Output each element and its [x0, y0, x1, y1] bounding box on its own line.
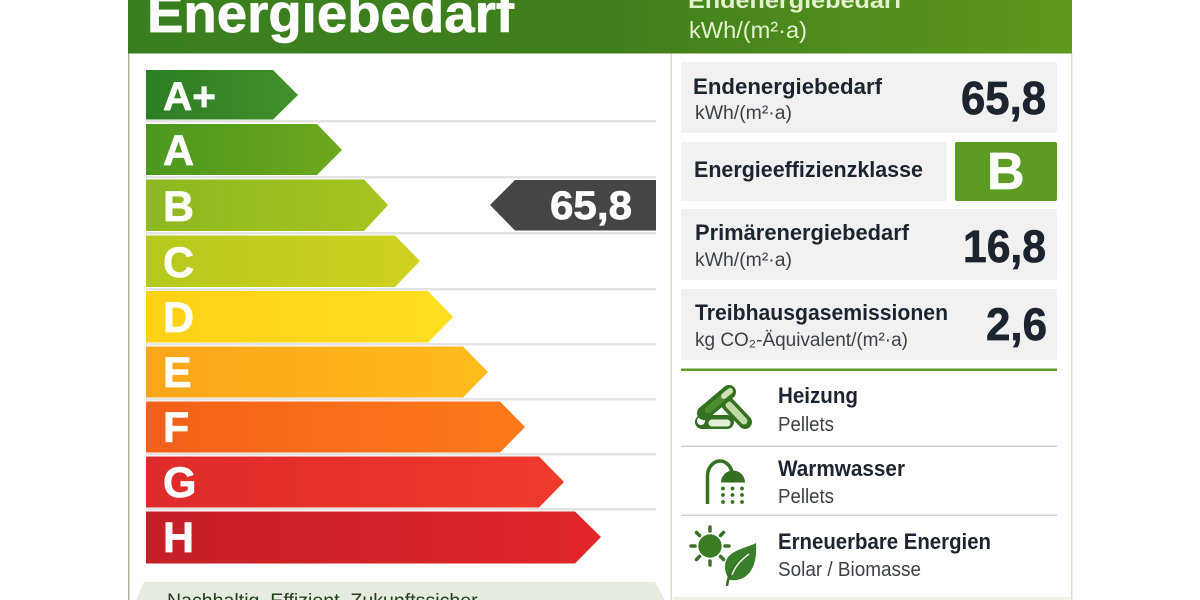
row: Warmwasser	[708, 456, 905, 508]
class A	[146, 124, 342, 175]
card: Endenergiebedarf: 65,8	[961, 72, 1046, 124]
class A+: A+	[163, 75, 216, 119]
icon: pellets	[697, 391, 745, 425]
class F: F	[163, 404, 189, 452]
card: Treibhausgasemissionen	[681, 289, 1057, 360]
header banner	[128, 0, 1072, 54]
card: Primärenergiebedarf: kWh/(m²·a)	[695, 250, 792, 271]
row: Erneuerbare Energien	[691, 527, 991, 586]
class H: H	[163, 514, 194, 562]
class B	[146, 180, 388, 231]
green divider	[681, 368, 1057, 371]
card: Energieeffizienzklasse: Energieeffizienzklasse	[694, 157, 923, 182]
card: Treibhausgasemissionen: kg CO₂-Äquivalent/(m²·a)	[695, 330, 908, 351]
class E: E	[163, 349, 192, 397]
header caption: kWh/(m²·a)	[689, 17, 807, 43]
class A+	[146, 70, 298, 120]
row: Erneuerbare Energien: Solar / Biomasse	[778, 559, 921, 581]
row: Warmwasser: Warmwasser	[778, 456, 905, 481]
value marker	[490, 180, 656, 230]
class D: D	[163, 294, 194, 342]
class C	[146, 236, 420, 287]
card: Primärenergiebedarf: 16,8	[963, 221, 1046, 272]
class badge: B	[987, 143, 1025, 201]
class D	[146, 291, 453, 342]
card: Treibhausgasemissionen: Treibhausgasemissionen	[695, 300, 948, 325]
row: Warmwasser: Pellets	[778, 486, 834, 508]
class F	[146, 402, 525, 452]
class badge	[955, 142, 1057, 201]
card: Endenergiebedarf: Endenergiebedarf	[693, 74, 883, 99]
class G	[146, 456, 564, 508]
class H	[146, 512, 601, 564]
card: Treibhausgasemissionen: 2,6	[986, 299, 1047, 350]
class G: G	[163, 459, 196, 507]
class B: B	[163, 183, 194, 231]
icon: shower	[708, 461, 745, 504]
row: Erneuerbare Energien: Erneuerbare Energien	[778, 529, 991, 554]
row: Heizung	[697, 383, 858, 436]
energy scale chart	[146, 70, 656, 564]
footer tagline	[136, 582, 665, 600]
scale row lines	[146, 120, 656, 510]
card: Primärenergiebedarf	[681, 209, 1057, 280]
header caption	[688, 0, 903, 43]
panel: frame	[128, 53, 1072, 600]
card: Endenergiebedarf: kWh/(m²·a)	[695, 103, 792, 124]
row: Heizung: Heizung	[778, 383, 858, 408]
card: Primärenergiebedarf: Primärenergiebedarf	[695, 220, 910, 245]
card: Endenergiebedarf	[681, 62, 1057, 133]
card: Energieeffizienzklasse	[681, 142, 947, 201]
icon: sun and leaf	[691, 527, 756, 586]
row: Heizung: Pellets	[778, 414, 834, 436]
class C: C	[163, 239, 194, 287]
class E	[146, 346, 488, 398]
value marker: 65,8	[550, 184, 632, 228]
class A: A	[163, 127, 194, 175]
